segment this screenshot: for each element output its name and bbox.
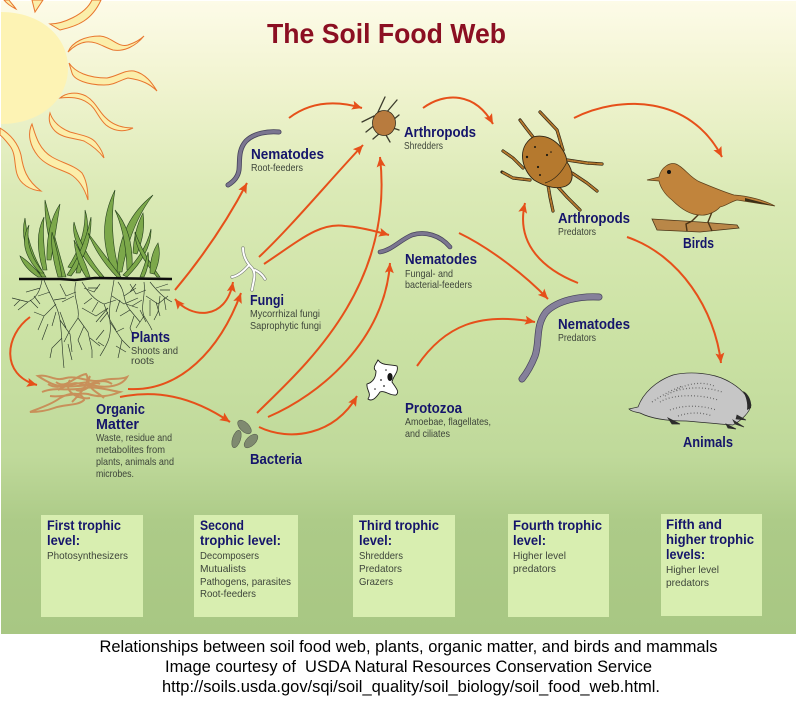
arrow: predatory nematodes to predatory arthropods (523, 203, 578, 283)
caption (100, 638, 718, 696)
panel: second trophic level (194, 515, 298, 617)
label: fungi: Saprophytic fungi (250, 320, 321, 332)
label: arthropods shredders: Shredders (404, 140, 443, 152)
panel: first trophic level: level: (47, 533, 80, 548)
arrow: predatory arthropods to animals (627, 237, 721, 363)
arrow: shredders to predatory arthropods (423, 97, 493, 124)
arrow: fungi to fungal-feeding nematodes (264, 225, 389, 264)
illustration: nematode predator (522, 297, 599, 379)
grass blades (20, 190, 160, 277)
arrow: bacteria to shredders (257, 157, 382, 413)
label: nematodes predators: Nematodes (558, 317, 630, 333)
panel: second trophic level: Root-feeders (200, 588, 256, 600)
label: plants: roots (131, 355, 154, 367)
label: arthropods predators: Predators (558, 226, 596, 238)
panel: fifth and higher trophic levels: levels: (666, 547, 705, 562)
arrow: fungi to shredders (259, 145, 363, 257)
illustration: bacteria (230, 418, 260, 450)
panel: second trophic level: Decomposers (200, 550, 259, 562)
caption: Relationships between soil food web, plants, organic matter, and birds and mammals (100, 638, 718, 656)
icon: sun (0, 0, 157, 200)
label: organic matter: Waste, residue and (96, 432, 172, 444)
label: nematodes fungal and bacterial feeders (405, 252, 477, 291)
illustration: fungi (232, 248, 265, 290)
panel: fourth trophic level: Higher level (513, 550, 566, 562)
panel: fifth and higher trophic levels (661, 514, 762, 616)
illustration: nematode fungal and bacterial feeder (380, 234, 450, 252)
arrow: plants to root-feeding nematodes (175, 183, 247, 290)
panel: third trophic level: Predators (359, 563, 402, 575)
panel: first trophic level: Photosynthesizers (47, 550, 128, 562)
illustration: nematode root-feeder (228, 132, 279, 185)
panel: fourth trophic level: level: (513, 533, 546, 548)
label: protozoa: and ciliates (405, 428, 450, 440)
panel: second trophic level: Second (200, 518, 244, 533)
arrow: bacteria to protozoa (259, 396, 357, 434)
ground line (19, 278, 172, 280)
label: nematodes root-feeders: Root-feeders (251, 162, 303, 174)
panel: third trophic level: level: (359, 533, 392, 548)
caption: http://soils.usda.gov/sqi/soil_quality/soil_biology/soil_food_web.html. (162, 678, 660, 696)
label: protozoa: Amoebae, flagellates, (405, 416, 491, 428)
label: organic matter: plants, animals and (96, 456, 174, 468)
label: nematodes fungal and bacterial feeders: Nematodes (405, 252, 477, 268)
arrow: protozoa to predatory nematodes (417, 319, 535, 366)
label: protozoa: Protozoa (405, 401, 463, 417)
label: nematodes predators (558, 317, 630, 344)
label: arthropods predators: Arthropods (558, 211, 630, 227)
label: protozoa (405, 401, 491, 440)
label: fungi: Mycorrhizal fungi (250, 308, 320, 320)
label: fungi (250, 293, 321, 332)
label: arthropods shredders (404, 125, 476, 152)
roots (12, 280, 172, 368)
caption: Image courtesy of USDA Natural Resources Conservation Service (165, 658, 652, 676)
panel: fourth trophic level: Fourth trophic (513, 518, 602, 533)
panel: fifth and higher trophic levels: predators (666, 577, 709, 589)
label: nematodes root-feeders (251, 147, 324, 174)
panel: fourth trophic level (508, 514, 609, 617)
panel: fifth and higher trophic levels: Fifth and (666, 517, 722, 532)
illustration: arthropod shredder (362, 97, 399, 142)
illustration: arthropod predator (502, 112, 602, 211)
label: organic matter: Organic (96, 402, 145, 418)
label: plants (131, 330, 178, 367)
panel: second trophic level: trophic level: (200, 533, 281, 548)
label: animals: Animals (683, 435, 733, 451)
label: organic matter: microbes. (96, 468, 134, 480)
panel: third trophic level: Third trophic (359, 518, 439, 533)
panel: fourth trophic level: predators (513, 563, 556, 575)
panel: second trophic level: Pathogens, parasites (200, 576, 291, 588)
arrows (10, 97, 722, 434)
label: nematodes root-feeders: Nematodes (251, 147, 324, 163)
arrow: organic matter to bacteria (120, 394, 230, 422)
panel: third trophic level (353, 515, 455, 617)
label: bacteria: Bacteria (250, 452, 303, 468)
arrow: plants and fungi exchange (175, 282, 233, 313)
label: plants: Shoots and (131, 345, 178, 357)
label: organic matter: metabolites from (96, 444, 165, 456)
illustration: protozoa (367, 360, 398, 400)
arrow: feeding nematodes to predatory nematodes (459, 233, 548, 299)
label: nematodes predators: Predators (558, 332, 596, 344)
label: birds: Birds (683, 236, 714, 252)
arrow: plants to organic matter (10, 317, 37, 385)
arrow: predatory arthropods to birds (574, 104, 722, 157)
label: organic matter: Matter (96, 417, 139, 433)
panel: fifth and higher trophic levels: higher trophic (666, 532, 754, 547)
panel: first trophic level (41, 515, 143, 617)
label: fungi: Fungi (250, 293, 284, 309)
panel: first trophic level: First trophic (47, 518, 121, 533)
panel: second trophic level: Mutualists (200, 563, 246, 575)
title: The Soil Food Web (267, 18, 506, 49)
label: organic matter (96, 402, 174, 480)
panel: fifth and higher trophic levels: Higher level (666, 564, 719, 576)
panel: third trophic level: Grazers (359, 576, 393, 588)
illustration: bird (647, 164, 775, 232)
arrow: bacteria to bacterial-feeding nematodes (268, 263, 390, 417)
label: plants: Plants (131, 330, 170, 346)
illustration: mole (629, 373, 751, 429)
arrow: root-feeding nematodes to shredders (289, 103, 362, 118)
illustration: organic matter (30, 374, 127, 412)
illustration: plants (12, 190, 172, 368)
label: arthropods shredders: Arthropods (404, 125, 476, 141)
label: arthropods predators (558, 211, 630, 238)
label: nematodes fungal and bacterial feeders: Fungal- and (405, 268, 453, 280)
arrow: organic matter to fungi (128, 293, 241, 389)
panel: third trophic level: Shredders (359, 550, 403, 562)
label: nematodes fungal and bacterial feeders: bacterial-feeders (405, 279, 472, 291)
